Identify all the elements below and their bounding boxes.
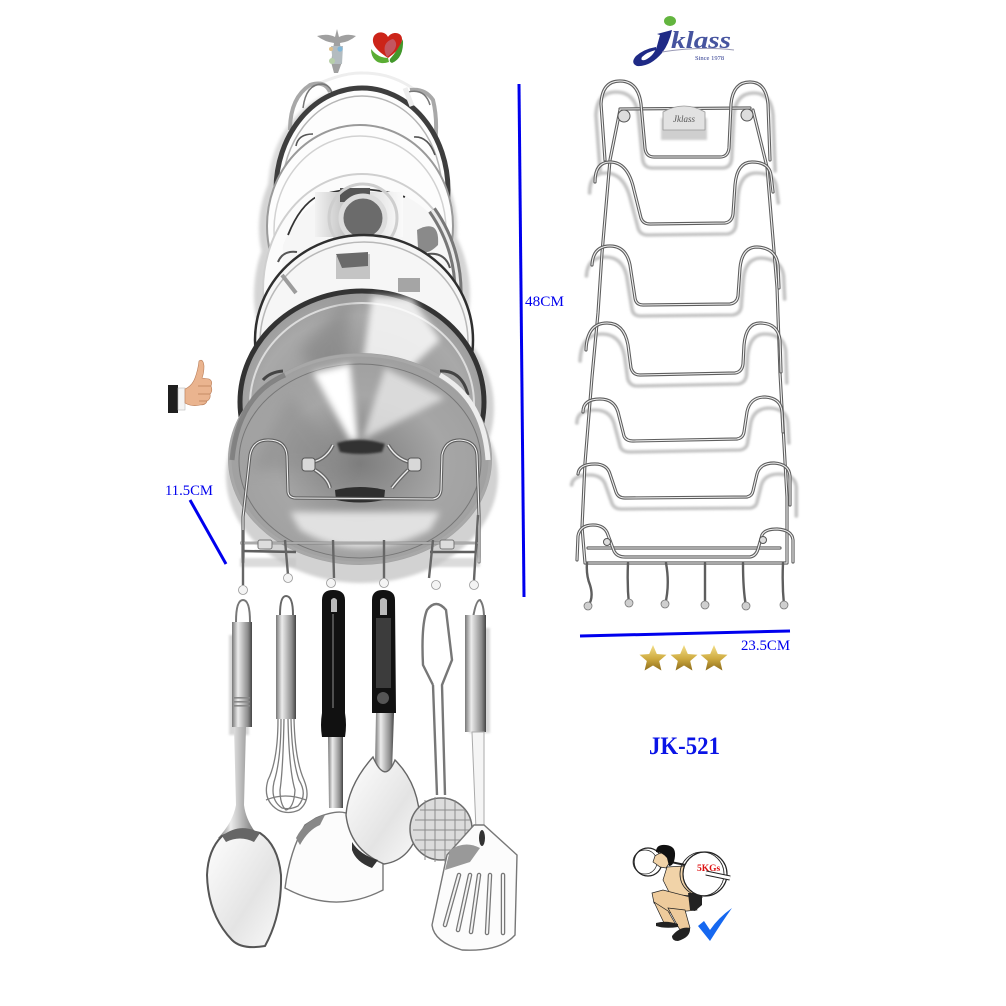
- lid 2: glass lid: [267, 125, 453, 327]
- lid handle: [302, 440, 421, 502]
- utensil: serving spoon: [207, 600, 281, 947]
- dimension label: 11.5CM: 11.5CM: [165, 483, 213, 499]
- rack shadow: [572, 92, 796, 516]
- lid 5: steel lid with dark rim: [240, 291, 484, 513]
- rating: three gold stars: [640, 645, 728, 670]
- product photo: rack holding lids and utensils: [207, 73, 517, 950]
- icon: thumbs up hand: [168, 360, 212, 413]
- icon: heart with leaves: [371, 32, 403, 63]
- icon: blue check mark: [698, 908, 732, 941]
- dimension: width line: [580, 631, 790, 636]
- model number: JK-521: [649, 733, 720, 760]
- lid 4: glass lid: [255, 235, 473, 445]
- rack frame rails and bars: [582, 108, 787, 563]
- rack hooks: [584, 563, 788, 610]
- brand logo: Jklass: klass: [671, 28, 731, 54]
- utensil: slotted spatula: [432, 600, 517, 950]
- lid shadows: [226, 88, 498, 583]
- rack shelf wires: [577, 81, 793, 562]
- rack logo plate: Jklass: [673, 114, 695, 124]
- dimension: height line: [519, 84, 524, 597]
- utensil: skimmer: [410, 604, 472, 862]
- lid 6: front steel lid: [228, 353, 492, 565]
- brand logo: Jklass: Since 1978: [695, 55, 724, 62]
- utensil: whisk: [266, 596, 307, 812]
- lid 1: top lid with dark rim: [276, 73, 448, 292]
- lid 3: glass lid with visible interior: [263, 174, 461, 406]
- utensil: large spoon with black handle: [346, 590, 420, 868]
- utensil: turner with black handle: [285, 590, 383, 902]
- rack bar and hooks: [238, 515, 480, 594]
- dimension label: 48CM: 48CM: [525, 294, 564, 310]
- rack wire on left product: [243, 440, 479, 562]
- rack logo plate: [661, 106, 707, 140]
- brand logo: Jklass: [633, 16, 734, 66]
- icon: caduceus medical symbol: [317, 29, 356, 73]
- dimension label: 23.5CM: 23.5CM: [741, 638, 790, 654]
- dimension: depth line: [190, 500, 226, 564]
- rack screws: [604, 109, 766, 546]
- icon: weightlifter squatting 5KGs: 5KGs: [697, 864, 721, 874]
- product photo: empty rack: [572, 81, 796, 610]
- icon: weightlifter squatting 5KGs: [633, 845, 730, 941]
